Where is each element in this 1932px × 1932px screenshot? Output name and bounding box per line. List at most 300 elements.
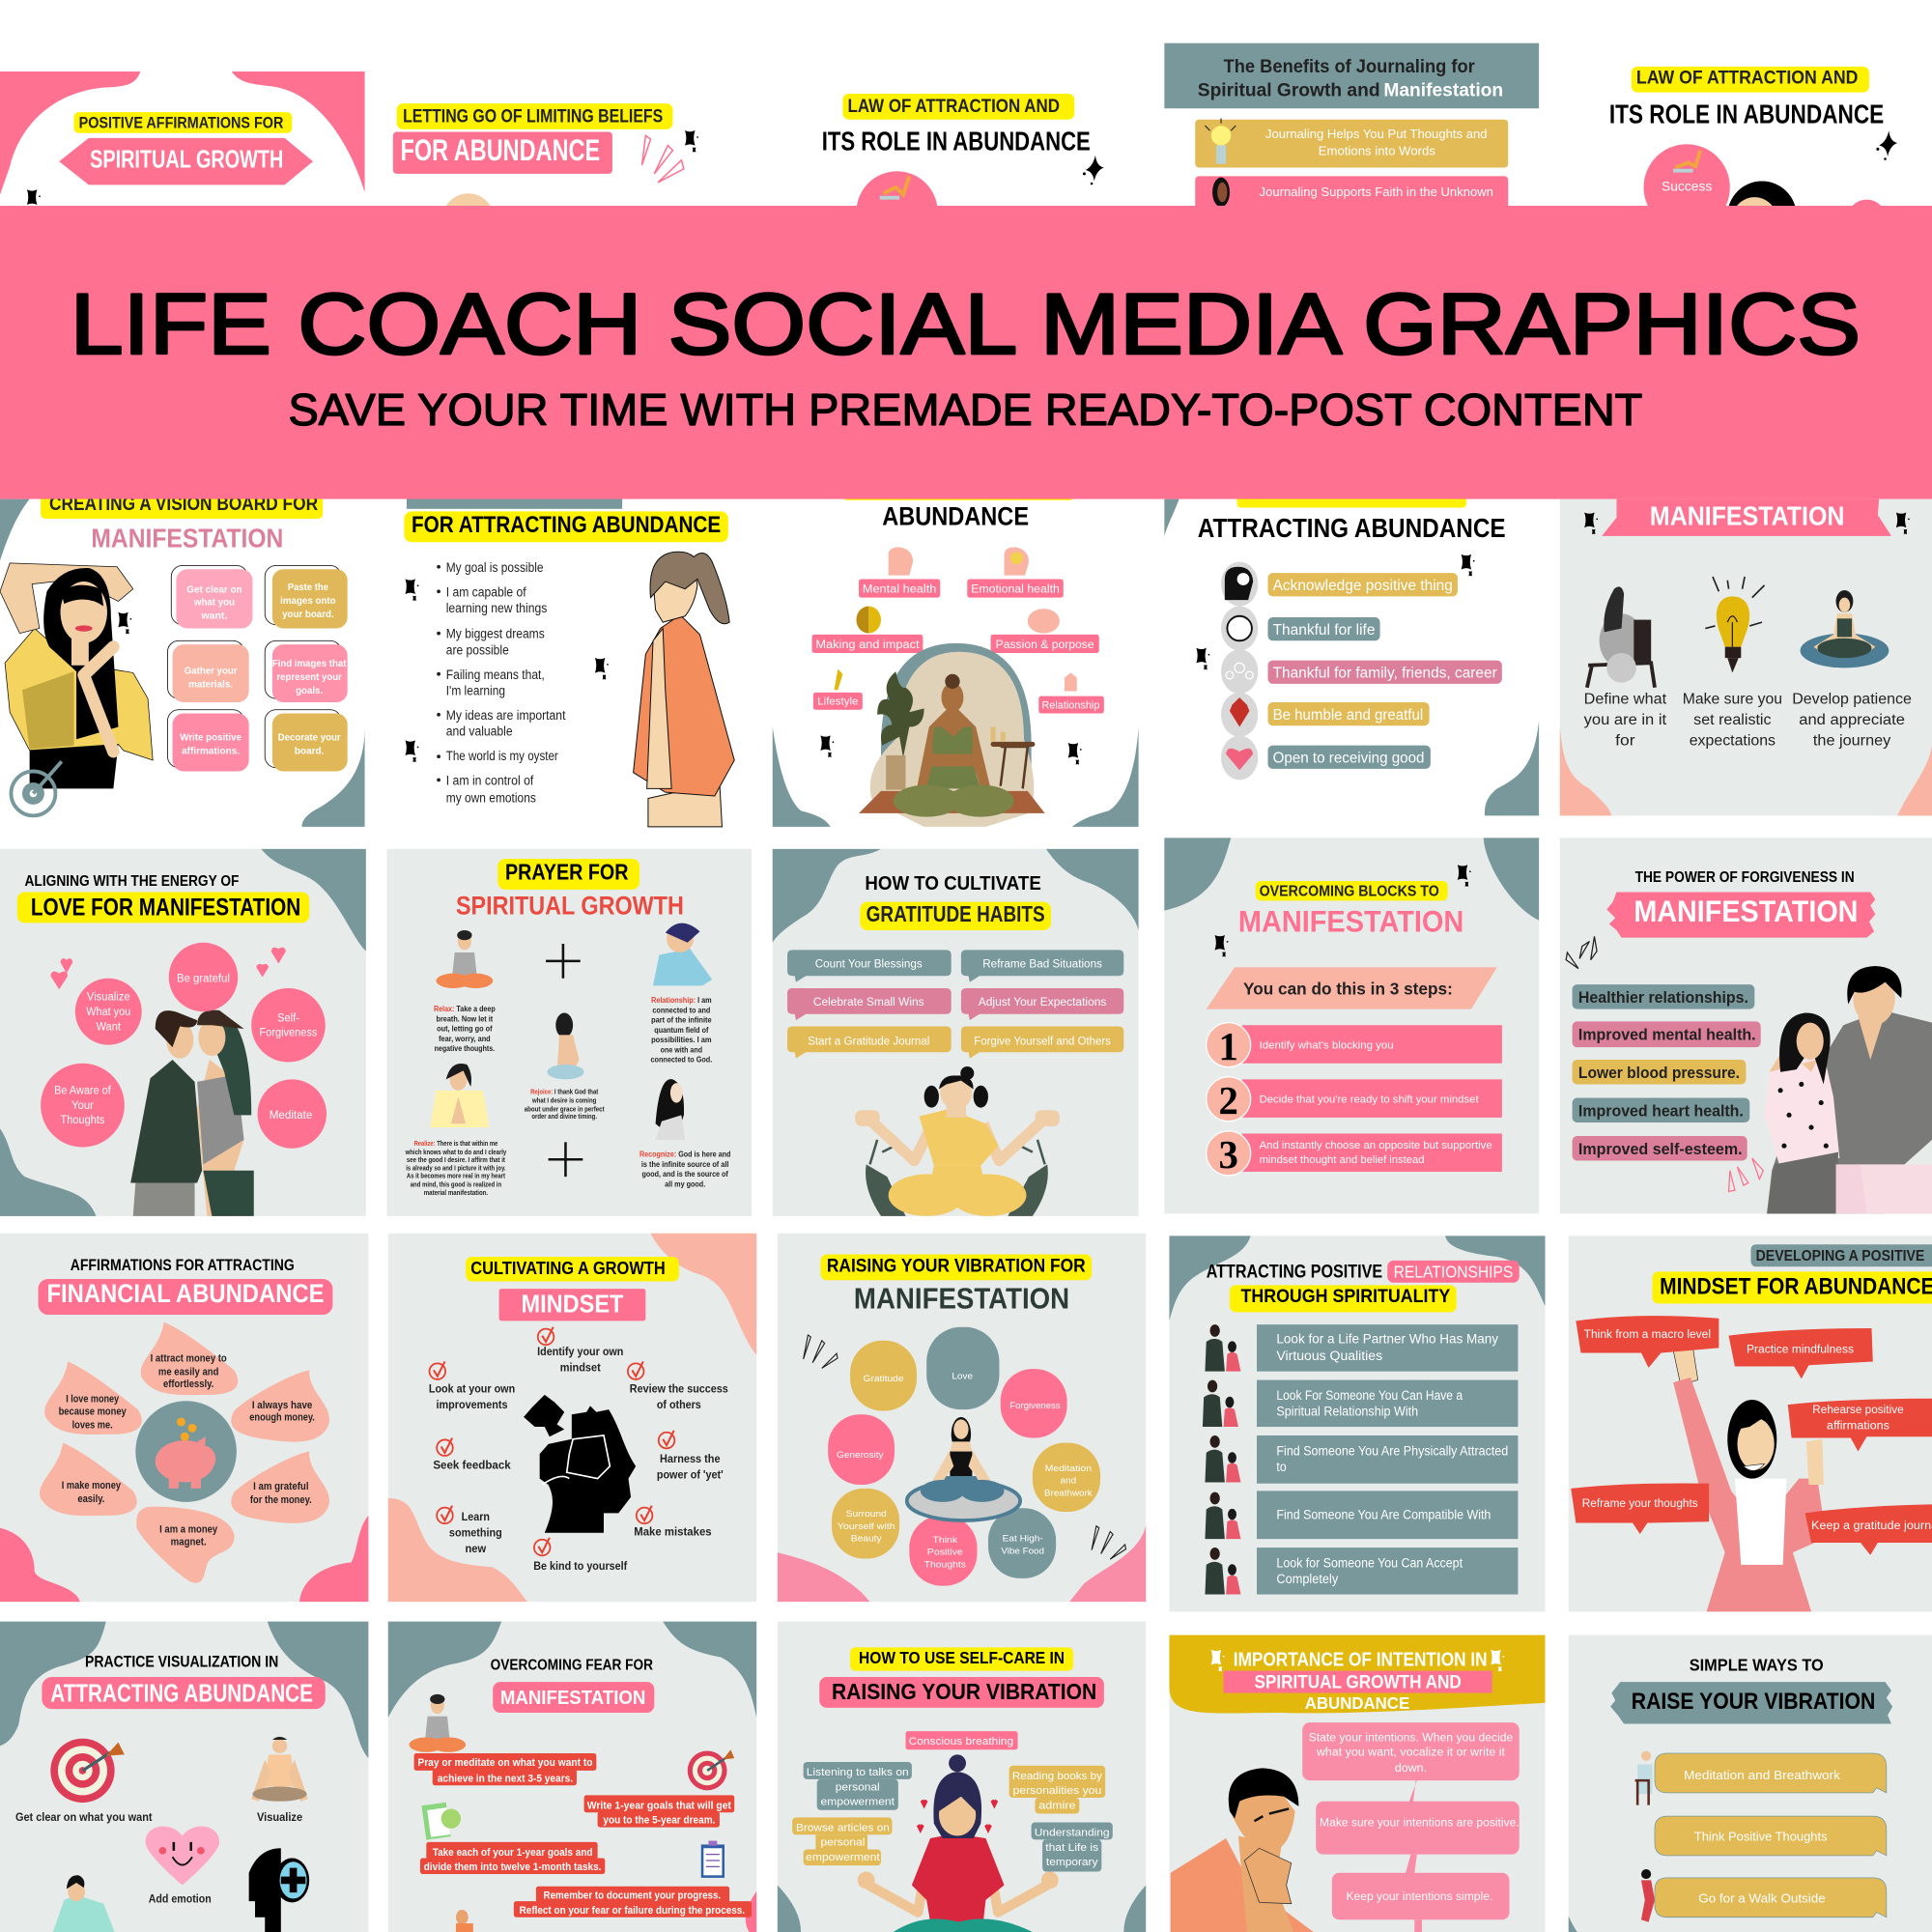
rows: relationship tips: [1257, 1324, 1518, 1595]
icon: meditating woman: [1801, 590, 1889, 668]
checklist: mindset items: Harness the: [660, 1452, 721, 1465]
pills: benefits: Improved self-esteem.: [1578, 1140, 1743, 1158]
speech bubbles: intentions: down.: [1395, 1761, 1427, 1775]
label: manifestation: [493, 1682, 654, 1713]
text: prayer steps: material manifestation.: [424, 1190, 488, 1197]
pills: gratitude actions: Be humble and greatful: [1273, 707, 1423, 724]
text: tips: expectations: [1690, 733, 1776, 750]
blobs: vibration practices: Forgiveness: [1009, 1401, 1061, 1411]
text: prayer steps: one with and: [661, 1044, 702, 1054]
wellness labels: Making and impact: [815, 638, 920, 651]
text: affirmations: I attract money to: [151, 1352, 227, 1364]
cards: vision board steps: Get clear on: [186, 585, 242, 596]
step 1: 1: [1218, 1025, 1238, 1068]
speech bubbles: habits: Start a Gratitude Journal: [808, 1035, 929, 1048]
label: letting go: [397, 103, 672, 129]
panel: raise your vibration: [1569, 1635, 1932, 1932]
brush banner: raise your vibration: RAISE YOUR VIBRATION: [1632, 1689, 1875, 1715]
pills: gratitude actions: Acknowledge positive thing: [1273, 578, 1453, 594]
wellness labels: [812, 579, 1104, 714]
panel: abundance wheel: [773, 497, 1139, 827]
speech bubbles: mindset tips: affirmations: [1827, 1419, 1889, 1433]
pills: benefits: [1573, 984, 1761, 1161]
circles: love practices: Meditate: [270, 1108, 313, 1122]
text: prayer steps: is already so and I picture it with joy.: [406, 1166, 506, 1173]
illustration: couple: [1765, 966, 1932, 1213]
speech bubbles: intentions: Keep your intentions simple.: [1346, 1889, 1492, 1903]
cards: vision board steps: Gather your: [185, 667, 238, 677]
icon: piggy bank: [135, 1401, 237, 1502]
text: tips: Develop patience: [1792, 691, 1912, 707]
checklist: mindset items: Look at your own: [429, 1381, 515, 1395]
checklist: mindset items: of others: [657, 1398, 701, 1411]
circles: love practices: What you: [86, 1005, 130, 1018]
panel: vision board: [0, 487, 365, 827]
note: take each goal: divide them into twelve 1-month tasks.: [424, 1861, 601, 1873]
note: write goals: [584, 1795, 734, 1828]
blobs: vibration practices: Love: [952, 1371, 973, 1381]
checklist: mindset items: Learn: [462, 1510, 490, 1523]
checklist: mindset items: Identify your own: [537, 1345, 623, 1358]
label: letting go: LETTING GO OF LIMITING BELIEFS: [403, 106, 663, 127]
icon: green plan: [421, 1803, 461, 1840]
checklist: mindset items: Be kind to yourself: [533, 1559, 628, 1573]
blobs: vibration practices: Vibe Food: [1001, 1546, 1044, 1556]
blobs: vibration practices: [828, 1327, 1100, 1586]
circles: love practices: Be grateful: [177, 972, 230, 985]
blobs: vibration practices: Eat High-: [1003, 1534, 1043, 1545]
petals: affirmation blobs: [40, 1322, 329, 1583]
card: faith in the unknown: [1195, 176, 1508, 213]
text: tips: for: [1615, 733, 1635, 750]
note: write goals: you to the 5-year dream.: [603, 1815, 715, 1827]
hexagon: spiritual growth: SPIRITUAL GROWTH: [90, 146, 283, 173]
blobs: vibration practices: Surround: [846, 1509, 887, 1520]
circles: love practices: Want: [96, 1019, 122, 1033]
circles: love practices: Visualize: [87, 990, 130, 1004]
speech bubbles: simple ways: Think Positive Thoughts: [1694, 1830, 1828, 1844]
text: affirmations: I am grateful: [253, 1481, 309, 1492]
speech bubbles: mindset tips: Keep a gratitude journal: [1811, 1519, 1932, 1532]
brush banner: raise your vibration: [1610, 1682, 1892, 1723]
text: prayer steps: all my good.: [665, 1179, 705, 1188]
panel: overcoming blocks: [1164, 838, 1539, 1213]
heading: affirmations: AFFIRMATIONS FOR ATTRACTING: [71, 1256, 295, 1274]
bullet list: and valuable: [446, 724, 513, 738]
speech bubbles: simple ways: Go for a Walk Outside: [1698, 1890, 1826, 1905]
bullet list: My goal is possible: [446, 560, 543, 575]
speech bubbles: mindset tips: Practice mindfulness: [1747, 1343, 1854, 1356]
brush banner: manifestation: [1606, 892, 1875, 938]
illustration: cheering woman: [1673, 1348, 1826, 1611]
label: for abundance: [393, 131, 612, 174]
text: affirmations: loves me.: [72, 1419, 113, 1431]
callout: three steps: [1207, 967, 1497, 1009]
note: take each goal: [420, 1842, 605, 1874]
text: prayer steps: fear, worry, and: [439, 1034, 491, 1043]
cards: vision board steps: Decorate your: [278, 733, 341, 744]
icon: target: [688, 1749, 734, 1790]
label: love for manifestation: LOVE FOR MANIFESTATION: [31, 895, 300, 922]
cards: vision board steps: affirmations.: [182, 747, 240, 757]
brush banner: manifestation: MANIFESTATION: [1634, 894, 1858, 928]
note: listening: Listening to talks on: [807, 1767, 909, 1778]
icon: smiling heart: [146, 1827, 219, 1886]
note: remember progress: Reflect on your fear or failure during the process.: [520, 1905, 745, 1917]
illustration: thinking man: [1171, 1768, 1314, 1932]
icons: wellness: [835, 547, 1077, 692]
banner: life coach social media graphics: [0, 206, 1932, 499]
step 3: [1207, 1131, 1502, 1177]
speech bubbles: mindset tips: Rehearse positive: [1812, 1403, 1904, 1416]
panel: how to use gratitude: [1164, 487, 1539, 815]
blobs: vibration practices: Meditation: [1045, 1463, 1092, 1474]
bullet list: [437, 560, 566, 805]
icon: pink arrows: [642, 135, 684, 183]
rows: relationship tips: Look for a Life Partner Who Has Many: [1276, 1331, 1498, 1346]
text: prayer steps: connected to and: [652, 1005, 710, 1014]
speech bubbles: habits: Reframe Bad Situations: [982, 956, 1102, 970]
checklist: mindset items: mindset: [560, 1361, 601, 1375]
pills: benefits: Healthier relationships.: [1578, 988, 1748, 1007]
text: prayer steps: is the infinite source of all: [641, 1159, 728, 1169]
icon: arrows: [1566, 936, 1597, 969]
checklist: mindset items: Seek feedback: [433, 1458, 511, 1471]
title: LIFE COACH SOCIAL MEDIA GRAPHICS: [71, 275, 1861, 372]
text: prayer steps: breath. Now let it: [437, 1013, 493, 1023]
rows: relationship tips: Virtuous Qualities: [1276, 1349, 1382, 1363]
panel: overcoming fear: [388, 1622, 756, 1932]
card: faith in the unknown: Journaling Supports Faith in the Unknown: [1260, 185, 1493, 199]
illustration: yoga woman: [855, 1066, 1060, 1216]
icon: head with plus: [249, 1848, 309, 1932]
text: affirmations: enough money.: [249, 1412, 315, 1424]
speech bubbles: habits: Adjust Your Expectations: [979, 995, 1106, 1009]
heading: benefits: [1198, 56, 1503, 100]
heading: benefits: The Benefits of Journaling for: [1224, 56, 1475, 77]
text: prayer steps: Relax: Take a deep: [434, 1004, 496, 1013]
circles: love practices: Self-: [277, 1010, 299, 1024]
wellness labels: Emotional health: [971, 582, 1060, 596]
icons: couples: [1203, 1324, 1240, 1595]
panel: law of attraction 2: [1609, 67, 1897, 250]
panel: law of attraction: [822, 94, 1104, 252]
heading: manifestation: MANIFESTATION: [854, 1283, 1069, 1316]
banner: manifestation: [1602, 499, 1891, 536]
circle: success: [1644, 144, 1730, 231]
cards: vision board steps: images onto: [280, 596, 336, 607]
panel: self-care: [778, 1622, 1146, 1932]
panel: benefits of journaling: [1164, 43, 1539, 213]
text: affirmations: I love money: [66, 1394, 119, 1406]
speech bubbles: simple ways: Meditation and Breathwork: [1684, 1768, 1841, 1782]
text: add emotion: Add emotion: [149, 1891, 212, 1905]
pills: gratitude actions: Thankful for life: [1273, 622, 1375, 639]
note: remember progress: Remember to document your progress.: [543, 1890, 721, 1902]
circle: success: Success: [1662, 179, 1712, 194]
panel: affirmations for attracting abundance: [404, 487, 734, 827]
text: tips: the journey: [1813, 733, 1890, 750]
cards: vision board steps: your board.: [282, 610, 334, 620]
step 2: Decide that you're ready to shift your mindset: [1260, 1094, 1479, 1106]
blobs: vibration practices: Thoughts: [924, 1559, 966, 1570]
note: understanding: temporary: [1046, 1857, 1098, 1868]
text: prayer steps: Recognize: God is here and: [639, 1150, 730, 1159]
text: affirmations: because money: [59, 1406, 127, 1417]
icons: small figures: [1635, 1750, 1655, 1922]
speech bubbles: habits: Forgive Yourself and Others: [974, 1035, 1111, 1048]
figures: praying people: [430, 923, 712, 1140]
icon: pink arrows: [1729, 1158, 1763, 1191]
step 1: Identify what's blocking you: [1260, 1039, 1394, 1051]
blobs: vibration practices: Yourself with: [838, 1521, 895, 1532]
note: browse: [792, 1817, 892, 1865]
note: browse: empowerment: [806, 1852, 881, 1863]
cards: vision board steps: Paste the: [288, 582, 328, 593]
text: prayer steps: order and divine timing.: [531, 1114, 597, 1121]
note: reading: Reading books by: [1012, 1771, 1102, 1782]
illustration: couple: [130, 1010, 254, 1216]
rows: relationship tips: to: [1276, 1460, 1287, 1474]
text: prayer steps: good, and is the source of: [642, 1169, 728, 1179]
panel: positive affirmations: [0, 71, 365, 212]
panel: raising your vibration: [778, 1234, 1146, 1602]
label: overcoming blocks: OVERCOMING BLOCKS TO: [1260, 883, 1439, 899]
text: tips: Make sure you: [1683, 691, 1782, 707]
panel: mindset for abundance: [1569, 1236, 1932, 1611]
cards: vision board steps: Write positive: [180, 733, 242, 744]
text: prayer steps: quantum field of: [654, 1025, 709, 1035]
label: relationships: RELATIONSHIPS: [1394, 1263, 1513, 1282]
text: prayer steps: what I desire is coming: [531, 1098, 596, 1105]
icons: plus signs: [546, 944, 582, 1177]
circles: love practices: Your: [71, 1098, 94, 1112]
step 3: And instantly choose an opposite but supportive: [1260, 1140, 1492, 1151]
icon: clipboard: [701, 1841, 724, 1878]
text: prayer steps: and mind, this good is realized in: [411, 1181, 501, 1188]
illustration: meditating woman: [859, 643, 1045, 827]
note: understanding: [1032, 1822, 1113, 1872]
pills: benefits: Lower blood pressure.: [1578, 1064, 1740, 1082]
heading: importance of intention: IMPORTANCE OF INTENTION IN: [1234, 1649, 1488, 1670]
bullet list: Failing means that,: [446, 668, 545, 682]
card: thoughts into words: [1195, 118, 1508, 167]
heading: spiritual growth: SPIRITUAL GROWTH: [456, 891, 684, 920]
text: tips: and appreciate: [1799, 712, 1905, 728]
text: affirmations: easily.: [77, 1493, 104, 1505]
text: prayer steps: Realize: There is that within me: [414, 1141, 497, 1148]
panel: gratitude habits: [773, 849, 1139, 1216]
label: attracting abundance: ATTRACTING ABUNDANCE: [50, 1680, 313, 1707]
label: gratitude habits: GRATITUDE HABITS: [867, 901, 1045, 926]
heading: abundance: ABUNDANCE: [882, 501, 1029, 530]
bullet list: My biggest dreams: [446, 627, 545, 641]
text: prayer steps: about under grace in perfect: [525, 1107, 605, 1114]
speech bubbles: intentions: what you want, vocalize it or write it: [1316, 1746, 1506, 1759]
label: law of attraction: LAW OF ATTRACTION AND: [1636, 69, 1859, 89]
illustration: woman: [0, 563, 153, 815]
text: prayer steps: Relationship: I am: [651, 995, 712, 1005]
text: prayer steps: [405, 995, 730, 1197]
heading: simple ways to: SIMPLE WAYS TO: [1690, 1656, 1824, 1675]
checklist: mindset items: something: [449, 1526, 502, 1540]
label: for abundance: FOR ABUNDANCE: [401, 132, 600, 167]
label: prayer for: PRAYER FOR: [505, 860, 629, 885]
subtitle: SAVE YOUR TIME WITH PREMADE READY-TO-POST CONTENT: [288, 384, 1642, 435]
note: take each goal: Take each of your 1-year goals and: [433, 1847, 593, 1859]
text: prayer steps: possibilities. I am: [651, 1035, 712, 1044]
note: listening: empowerment: [820, 1797, 895, 1808]
pills: gratitude actions: Thankful for family, friends, career: [1273, 666, 1497, 682]
pills: benefits: Improved mental health.: [1578, 1026, 1756, 1044]
circles: love practices: [41, 943, 327, 1149]
checklist: mindset items: improvements: [437, 1398, 508, 1411]
cards: vision board steps: goals.: [296, 686, 323, 696]
speech bubbles: habits: Count Your Blessings: [815, 956, 923, 970]
checklist: mindset items: [429, 1327, 728, 1573]
pills: gratitude actions: Open to receiving good: [1273, 751, 1424, 767]
circles: love practices: Thoughts: [60, 1113, 104, 1126]
panel: prayer for spiritual growth: [387, 849, 752, 1216]
text: affirmations: [59, 1352, 315, 1548]
speech bubbles: mindset tips: [1571, 1316, 1932, 1555]
text: prayer steps: connected to God.: [650, 1054, 712, 1064]
text: visualize: Visualize: [257, 1810, 302, 1824]
label: raising your vibration: RAISING YOUR VIBRATION: [832, 1679, 1096, 1704]
text: tips: [1584, 691, 1912, 750]
heading: benefits: Spiritual Growth and: [1198, 79, 1380, 100]
text: prayer steps: Rejoice: I thank God that: [530, 1090, 599, 1096]
text: affirmations: I make money: [62, 1480, 121, 1492]
speech bubbles: simple ways: [1655, 1753, 1887, 1918]
note: understanding: that Life is: [1045, 1842, 1098, 1854]
icon: man: [53, 1875, 115, 1932]
rows: relationship tips: Completely: [1276, 1572, 1338, 1586]
rows: relationship tips: Look For Someone You Can Have a: [1276, 1388, 1463, 1403]
icon: target: [50, 1739, 125, 1803]
bullet list: The world is my oyster: [446, 749, 558, 763]
text: affirmations: for the money.: [250, 1494, 312, 1506]
text: tips: set realistic: [1693, 712, 1772, 728]
rows: relationship tips: Find Someone You Are Physically Attracted: [1276, 1443, 1508, 1458]
speech bubbles: intentions: State your intentions. When you decide: [1309, 1730, 1514, 1744]
cards: vision board steps: represent your: [276, 672, 342, 683]
note: reading: admire: [1038, 1800, 1076, 1811]
panel: manifestation steps: [1560, 499, 1932, 815]
heading: manifestation: MANIFESTATION: [1238, 903, 1463, 938]
heading: practice visualization: PRACTICE VISUALIZATION IN: [85, 1653, 278, 1671]
note: pray or meditate: [414, 1753, 596, 1785]
text: prayer steps: part of the infinite: [651, 1015, 712, 1025]
heading: attracting abundance: ATTRACTING ABUNDANCE: [1198, 513, 1506, 543]
heading: abundance: ABUNDANCE: [1305, 1693, 1409, 1713]
icon: meditating man: [409, 1694, 466, 1752]
checklist: mindset items: Make mistakes: [634, 1524, 712, 1538]
heading: benefits: Manifestation: [1383, 79, 1503, 100]
blobs: vibration practices: Think: [933, 1535, 957, 1546]
speech bubbles: mindset tips: Reframe your thoughts: [1582, 1496, 1698, 1510]
panel: practice visualization: [0, 1622, 368, 1932]
label: cultivating a growth: CULTIVATING A GROWTH: [470, 1258, 666, 1278]
bullet list: I am capable of: [446, 584, 526, 599]
circles: love practices: Be Aware of: [54, 1084, 111, 1097]
speech bubbles: intentions: Make sure your intentions are positive.: [1320, 1815, 1520, 1829]
checklist: mindset items: Review the success: [630, 1381, 728, 1395]
card: thoughts into words: Journaling Helps You Put Thoughts and: [1265, 127, 1488, 141]
note: browse: personal: [820, 1837, 865, 1849]
text: affirmations: effortlessly.: [163, 1378, 213, 1390]
label: creating a vision board: [41, 487, 323, 519]
text: tips: Define what: [1584, 691, 1667, 707]
label: law of attraction: LAW OF ATTRACTION AND: [848, 97, 1060, 117]
wellness labels: Mental health: [863, 582, 936, 596]
text: affirmations: I always have: [252, 1400, 312, 1411]
callout: three steps: You can do this in 3 steps:: [1243, 979, 1453, 998]
text: prayer steps: see the good I desire. I affirm that it: [407, 1157, 506, 1164]
label: spiritual growth and: SPIRITUAL GROWTH AND: [1254, 1672, 1462, 1692]
hexagon: spiritual growth: [59, 138, 313, 185]
text: affirmations: magnet.: [171, 1536, 207, 1548]
note: listening: personal: [836, 1781, 880, 1793]
note: reading: personalities you: [1012, 1785, 1101, 1797]
label: for attracting abundance: FOR ATTRACTING ABUNDANCE: [412, 512, 721, 538]
step 1: [1207, 1023, 1502, 1068]
illustration: woman with ponytail: [634, 552, 734, 827]
cards: vision board steps: [167, 565, 348, 771]
heading: aligning: ALIGNING WITH THE ENERGY OF: [25, 873, 240, 890]
heading: power of forgiveness: THE POWER OF FORGIVENESS IN: [1635, 869, 1855, 886]
blobs: vibration practices: Breathwork: [1044, 1488, 1093, 1498]
bullet list: my own emotions: [446, 790, 536, 805]
note: understanding: Understanding: [1035, 1828, 1110, 1839]
label: positive affirmations for: POSITIVE AFFIRMATIONS FOR: [79, 114, 283, 132]
icon: light bulb: [1705, 577, 1765, 672]
heading: manifestation: MANIFESTATION: [91, 523, 283, 553]
icon: meditating man: [251, 1737, 308, 1802]
wellness labels: Passion & porpose: [996, 638, 1094, 651]
icon: head with puzzle: [524, 1395, 636, 1533]
label: manifestation: MANIFESTATION: [500, 1688, 645, 1709]
pills: benefits: Improved heart health.: [1578, 1102, 1744, 1121]
heading: attracting positive: ATTRACTING POSITIVE: [1207, 1263, 1382, 1283]
note: write goals: Write 1-year goals that will get: [587, 1800, 731, 1811]
cards: vision board steps: what you: [193, 597, 235, 608]
heading: its role: ITS ROLE IN ABUNDANCE: [822, 127, 1091, 156]
label: through spirituality: THROUGH SPIRITUALITY: [1240, 1287, 1450, 1307]
label: mindset: [499, 1289, 645, 1321]
label: conscious breathing: Conscious breathing: [909, 1736, 1013, 1747]
speech bubbles: habits: [787, 950, 1123, 1059]
text: prayer steps: As it becomes more real in my heart: [407, 1173, 506, 1179]
panel: power of forgiveness: [1560, 838, 1932, 1213]
icons: gratitude circles: [1221, 562, 1258, 780]
note: pray or meditate: Pray or meditate on what you want to: [417, 1757, 593, 1769]
illustration: self-care woman: [858, 1754, 1059, 1932]
blobs: vibration practices: and: [1061, 1476, 1076, 1487]
cards: vision board steps: materials.: [188, 680, 233, 691]
bullet list: I am in control of: [446, 773, 534, 787]
heading: how to cultivate: HOW TO CULTIVATE: [865, 873, 1041, 895]
bullet list: learning new things: [446, 601, 548, 615]
step 3: 3: [1218, 1133, 1238, 1177]
speech bubbles: habits: Celebrate Small Wins: [813, 995, 924, 1009]
bullet list: My ideas are important: [446, 708, 566, 723]
note: reading: [1009, 1766, 1105, 1814]
rows: relationship tips: Find Someone You Are Compatible With: [1276, 1508, 1491, 1522]
cards: vision board steps: Find images that: [272, 659, 347, 669]
step 2: [1207, 1077, 1502, 1122]
wellness labels: Relationship: [1041, 699, 1099, 711]
